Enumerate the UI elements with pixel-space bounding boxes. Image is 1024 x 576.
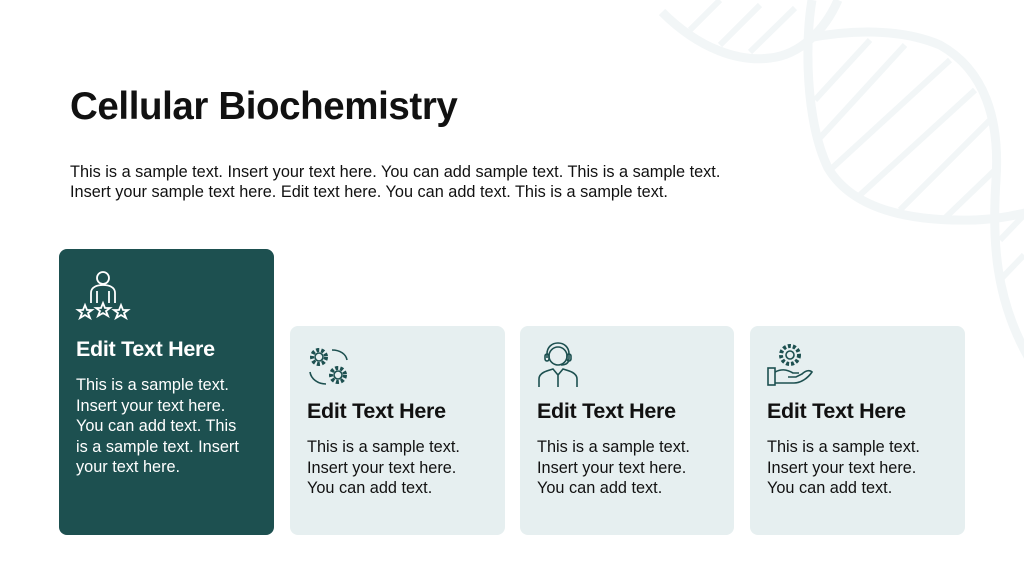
text: Insert your text here.: [537, 458, 686, 476]
text: You can add text.: [307, 479, 432, 497]
icon: hand with gear: [767, 344, 813, 386]
text: Insert your text here.: [767, 458, 916, 476]
icon: headset agent: [538, 342, 578, 387]
icon: person with stars: [75, 271, 131, 320]
card 1 dark: [59, 249, 274, 535]
text: [537, 438, 690, 497]
intro text: Insert your sample text here. Edit text here. You can add text. This is a sample text.: [70, 183, 668, 201]
text: This is a sample text.: [76, 376, 229, 394]
text: Insert your text here.: [76, 396, 225, 414]
text: is a sample text. Insert: [76, 438, 239, 456]
text: This is a sample text.: [307, 438, 460, 456]
card 2: [290, 326, 505, 535]
text: You can add text. This: [76, 417, 236, 435]
heading: Edit Text Here: [307, 399, 446, 423]
text: You can add text.: [537, 479, 662, 497]
text: [767, 438, 920, 497]
heading: Edit Text Here: [767, 399, 906, 423]
intro text: [70, 163, 720, 201]
text: Insert your text here.: [307, 458, 456, 476]
card 3: [520, 326, 734, 535]
title: Cellular Biochemistry: [70, 85, 457, 128]
text: [76, 376, 239, 476]
card 4: [750, 326, 965, 535]
text: [307, 438, 460, 497]
heading: Edit Text Here: [537, 399, 676, 423]
text: your text here.: [76, 458, 180, 476]
text: This is a sample text.: [537, 438, 690, 456]
text: This is a sample text.: [767, 438, 920, 456]
icon: gears: [309, 348, 348, 385]
intro text: This is a sample text. Insert your text here. You can add sample text. This is a sample text.: [70, 163, 720, 181]
text: You can add text.: [767, 479, 892, 497]
heading: Edit Text Here: [76, 337, 215, 361]
